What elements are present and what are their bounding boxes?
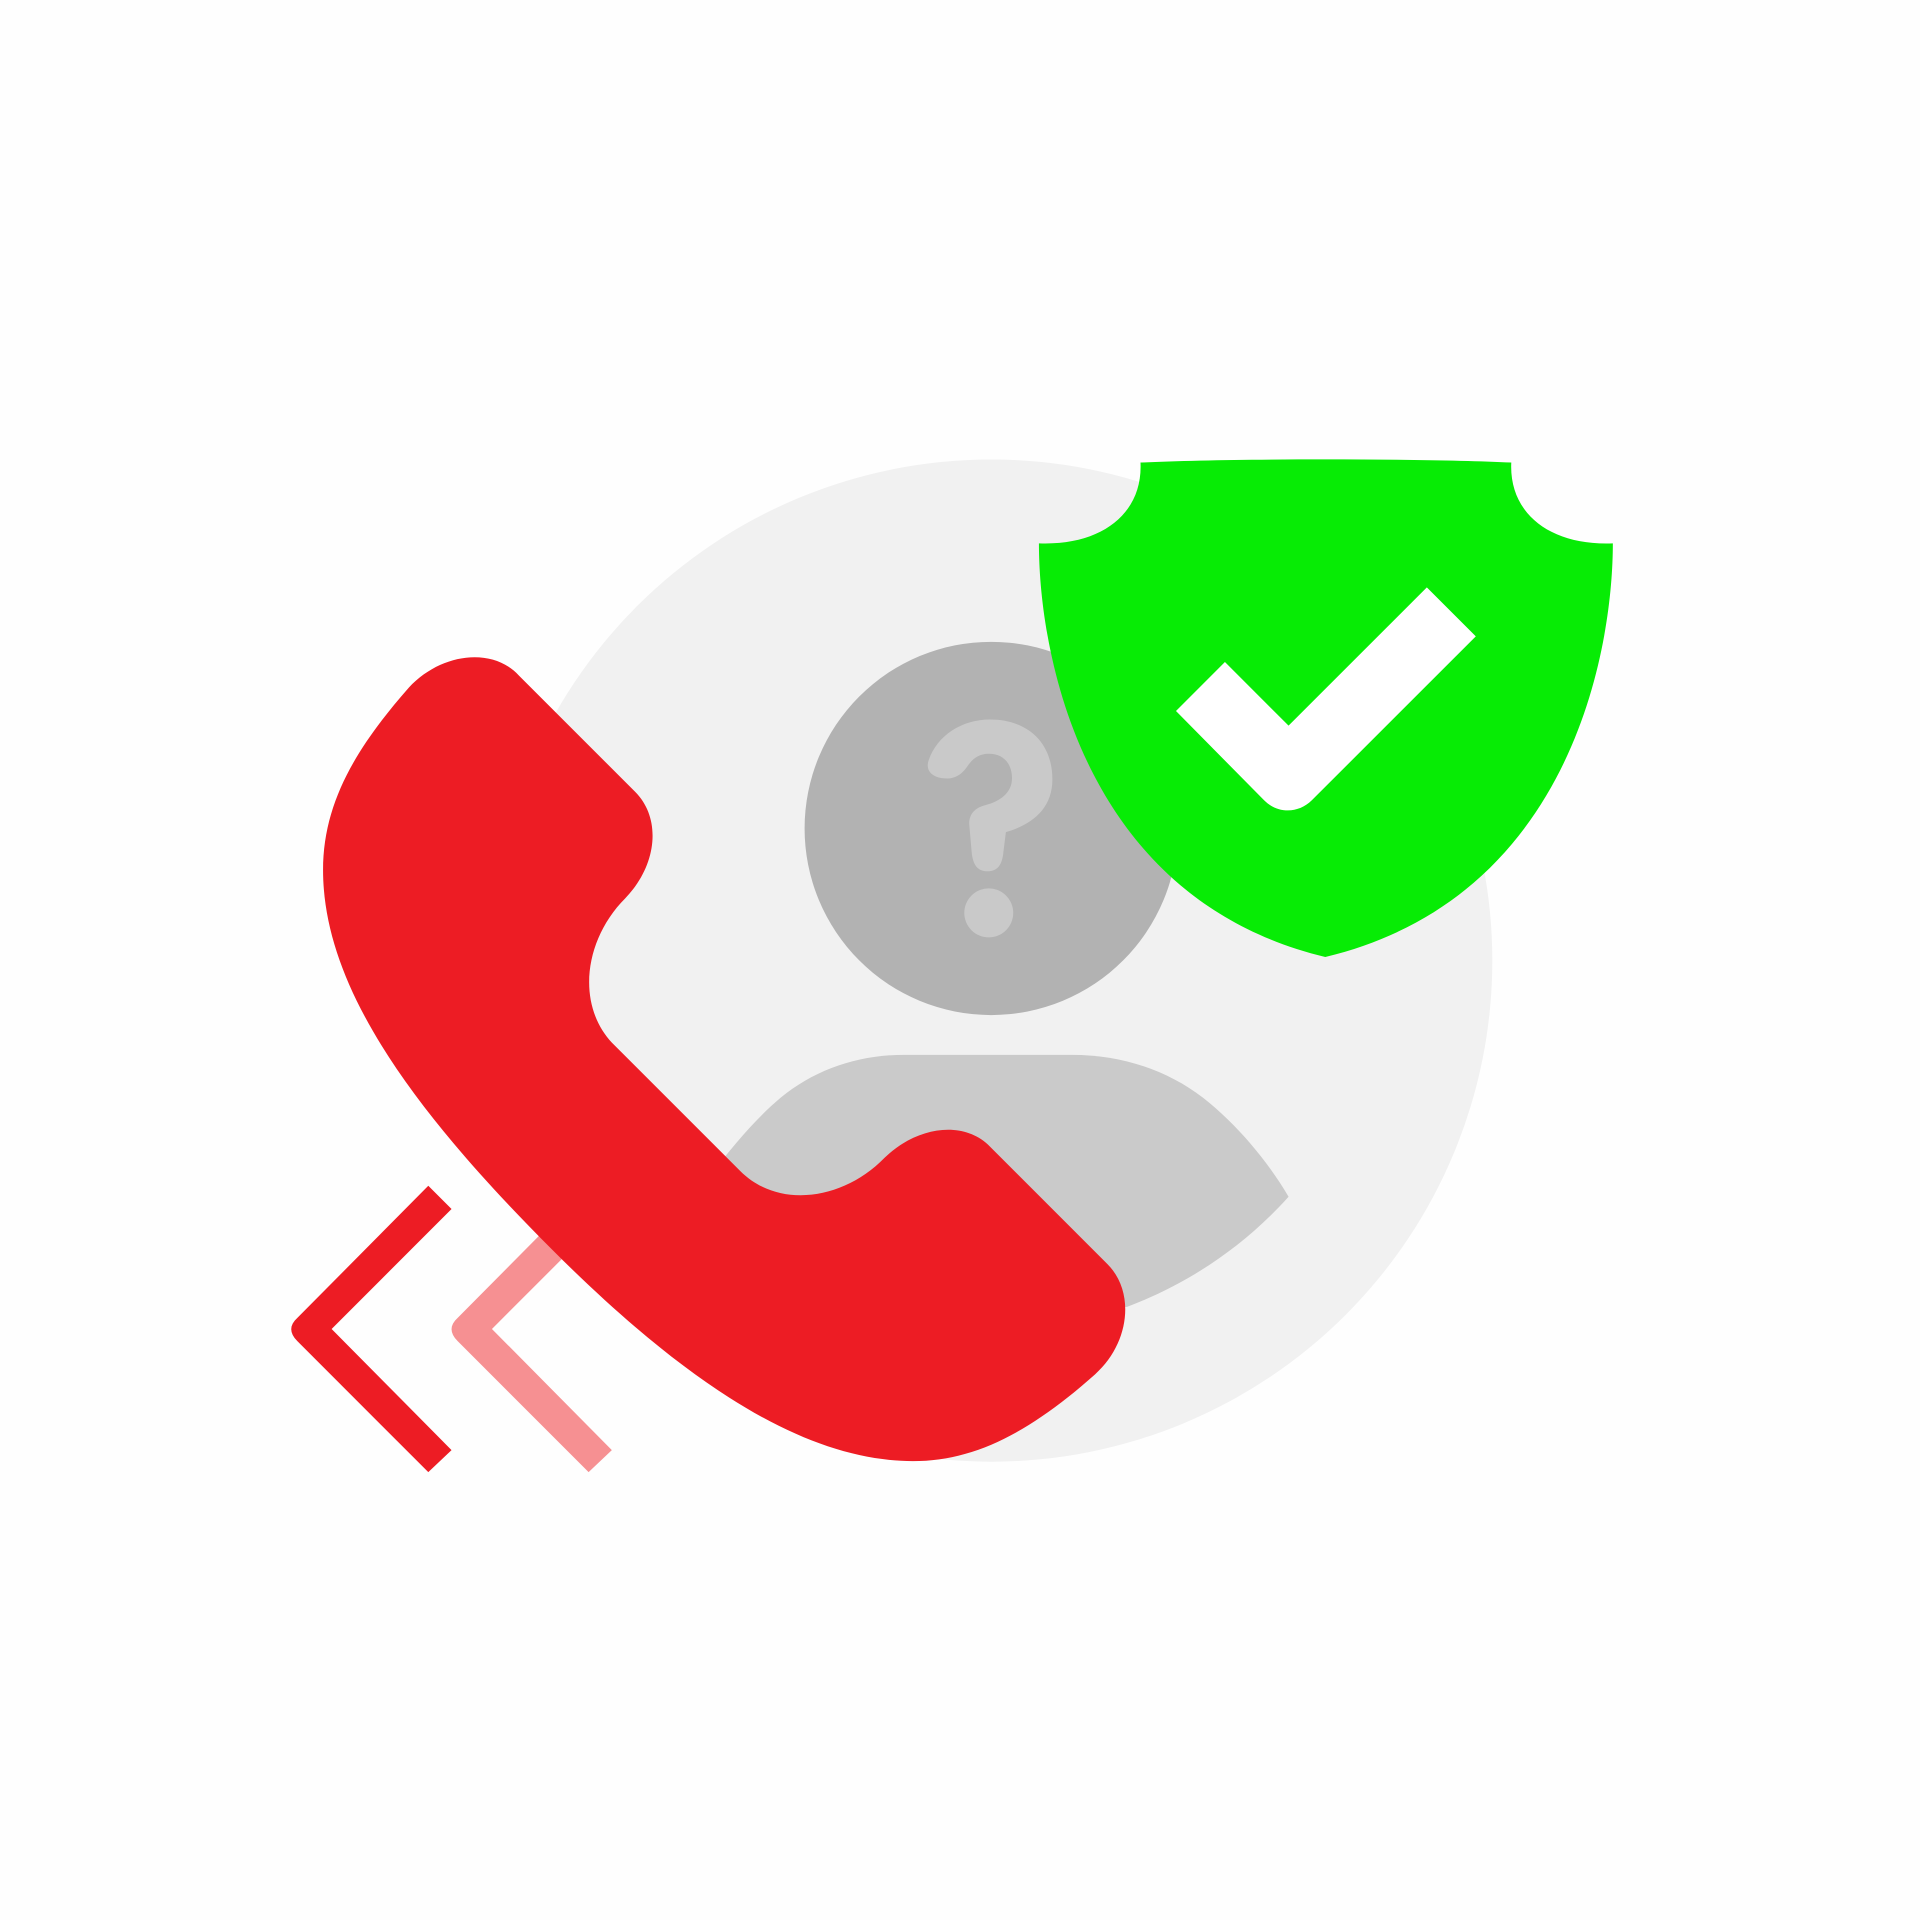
icon: telephone handset <box>323 657 1125 1461</box>
icon: faded chevron arrow <box>452 1186 612 1472</box>
icon: unknown person <box>687 642 1289 1317</box>
shield body <box>1039 459 1613 957</box>
icon: security shield <box>1039 459 1613 957</box>
person head <box>805 642 1178 1015</box>
background circle <box>490 460 1492 1462</box>
check mark <box>1176 587 1476 810</box>
icon: solid chevron arrow <box>291 1186 452 1472</box>
icon: question mark <box>928 720 1052 937</box>
person body <box>687 1055 1289 1317</box>
